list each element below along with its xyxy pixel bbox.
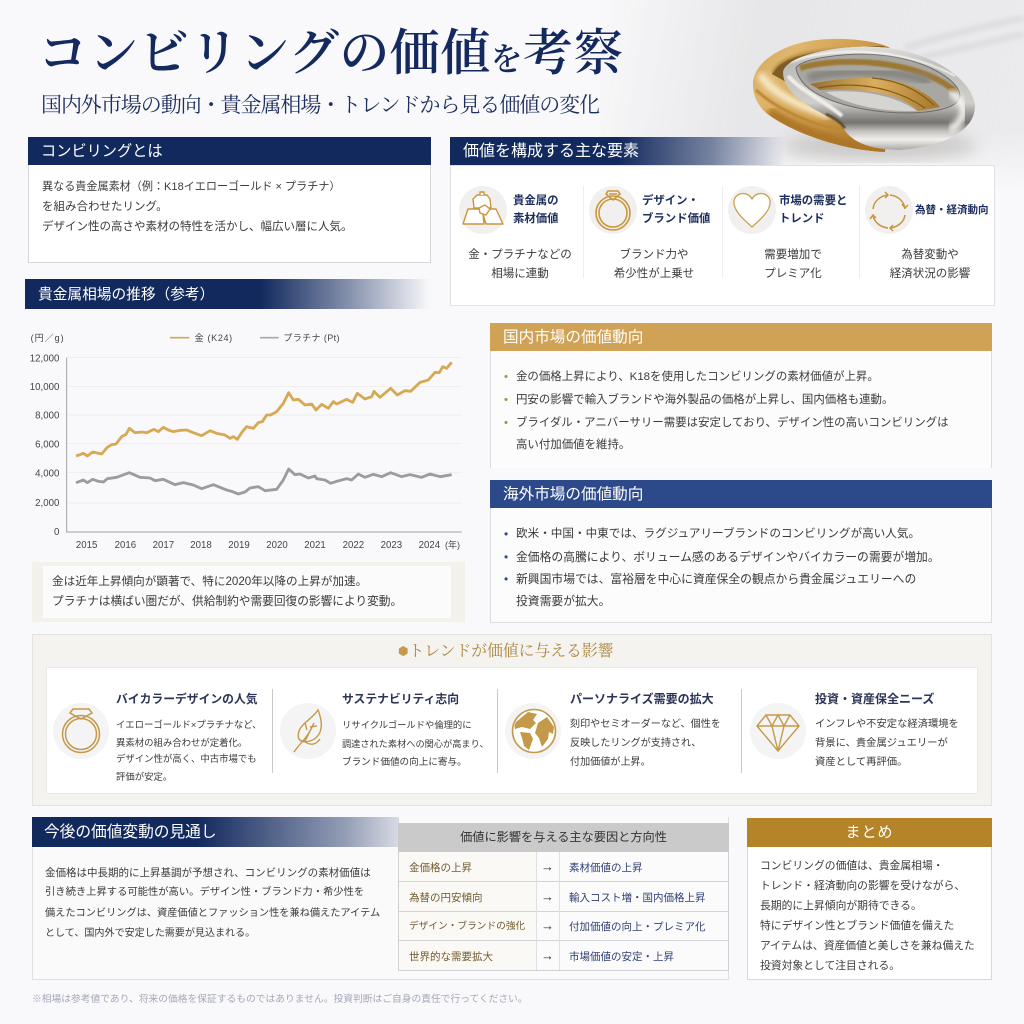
summary text: 投資対象として注目される。 <box>760 960 900 972</box>
factor: market demand and trend <box>728 186 847 280</box>
heading: value factors <box>450 137 785 165</box>
trend: sustainability: 調達された素材への関心が高まり、 <box>342 739 489 749</box>
chart: gold and platinum prices: 2016 <box>115 540 136 551</box>
chart: gold and platinum prices: 2019 <box>228 540 250 551</box>
footnote: ※相場は参考値であり、将来の価格を保証するものではありません。投資判断はご自身の責任で行ってください。 <box>32 994 528 1005</box>
chart: gold and platinum prices: 2024 <box>419 540 441 551</box>
factor: currency and economy: 為替・経済動向 <box>915 204 988 216</box>
trend: investment: 背景に、貴金属ジュエリーが <box>815 738 948 749</box>
chart: gold and platinum prices: 2018 <box>190 540 212 551</box>
chart: gold and platinum prices: 8,000 <box>35 411 59 422</box>
divider <box>272 689 273 773</box>
factor: market demand and trend: 需要増加で <box>764 249 822 261</box>
marble background <box>641 0 1024 165</box>
summary text: アイテムは、資産価値と美しさを兼ね備えた <box>760 940 975 952</box>
factor: material value: 金・プラチナなどの <box>468 249 572 261</box>
trend: personalization: 刻印やセミオーダーなど、個性を <box>570 719 721 730</box>
bullet list: overseas market <box>504 527 940 608</box>
heading: overseas market <box>490 480 992 508</box>
divider <box>583 186 584 278</box>
bullet list: domestic market: • <box>504 394 508 406</box>
table rows: 輸入コスト増・国内価格上昇 <box>569 892 706 904</box>
chart note <box>32 562 465 622</box>
outlook text: 金価格は中長期的に上昇基調が予想され、コンビリングの素材価値は <box>45 867 371 879</box>
factor: currency and economy <box>865 186 988 280</box>
definition text: デザイン性の高さや素材の特性を活かし、幅広い層に人気。 <box>42 221 352 233</box>
chart note: プラチナは横ばい圏だが、供給制約や需要回復の影響により変動。 <box>52 595 402 608</box>
chart: gold and platinum prices: 2,000 <box>35 498 59 509</box>
chart: gold and platinum prices: (円／g) <box>31 333 65 343</box>
factor: material value: 貴金属の <box>513 195 559 207</box>
divider <box>741 689 742 773</box>
trend: bicolor design: デザイン性が高く、中古市場でも <box>116 753 257 764</box>
factor: design and brand value <box>589 186 710 280</box>
bullet list: domestic market: • <box>504 417 508 429</box>
trend: personalization <box>505 692 721 768</box>
table rows: → <box>541 918 554 933</box>
title: コンビリングの価値を考察 <box>38 25 624 81</box>
trend: investment: インフレや不安定な経済環境を <box>815 719 959 730</box>
chart: gold and platinum prices: 10,000 <box>30 382 59 393</box>
chart: gold and platinum prices: 2017 <box>153 540 174 551</box>
table rows: 為替の円安傾向 <box>409 892 482 904</box>
trend: sustainability: リサイクルゴールドや倫理的に <box>342 720 472 730</box>
panel: what is combination ring <box>28 137 431 263</box>
chart: gold and platinum prices: 2021 <box>304 540 326 551</box>
bullet list: domestic market: 金の価格上昇により、K18を使用したコンビリングの素材価値が上昇。 <box>516 371 879 383</box>
trend: bicolor design: バイカラーデザインの人気 <box>116 692 258 706</box>
panel: summary <box>747 818 992 980</box>
factor: material value: 相場に連動 <box>491 268 549 280</box>
panel: domestic market <box>490 323 992 468</box>
summary text: 特にデザイン性とブランド価値を備えた <box>760 920 954 932</box>
outlook text: として、国内外で安定した需要が見込まれる。 <box>45 928 255 939</box>
heading: value factors: 価値を構成する主な要素 <box>463 143 639 160</box>
factor: design and brand value: 希少性が上乗せ <box>614 268 694 280</box>
chart: gold and platinum prices: 2020 <box>266 540 288 551</box>
heading: outlook <box>32 817 399 847</box>
heading: precious metal trend <box>25 279 430 309</box>
definition text: を組み合わせたリング。 <box>42 201 168 213</box>
trend: bicolor design: 異素材の組み合わせが定着化。 <box>116 737 247 748</box>
table: factors and direction <box>398 823 729 971</box>
summary text: コンビリングの価値は、貴金属相場・ <box>760 860 944 872</box>
bullet list: domestic market: • <box>504 371 508 383</box>
bullet list: domestic market <box>504 370 949 451</box>
heading: domestic market <box>490 323 992 351</box>
trend: investment: 投資・資産保全ニーズ <box>815 692 934 706</box>
table rows: デザイン・ブランドの強化 <box>409 921 525 932</box>
trend cards <box>46 667 978 794</box>
summary text: トレンド・経済動向の影響を受けながら、 <box>760 880 965 892</box>
trend: personalization: 付加価値が上昇。 <box>570 757 651 768</box>
chart: gold and platinum prices: 12,000 <box>30 353 59 364</box>
subtitle: 国内外市場の動向・貴金属相場・トレンドから見る価値の変化 <box>41 93 599 117</box>
chart: gold and platinum prices: 2023 <box>381 540 402 551</box>
panel: outlook <box>32 817 729 980</box>
bullet list: overseas market: 欧米・中国・中東では、ラグジュアリーブランドのコンビリングが高い人気。 <box>516 527 920 540</box>
ring interior <box>796 54 960 113</box>
heading: domestic market: 国内市場の価値動向 <box>503 329 643 346</box>
trend: bicolor design: イエローゴールド×プラチナなど、 <box>116 719 262 730</box>
heading: trend influence: ⬢トレンドが価値に与える影響 <box>398 643 613 660</box>
bullet list: overseas market: • <box>504 527 508 541</box>
bullet list: domestic market: ブライダル・アニバーサリー需要は安定しており、デザイン性の高いコンビリングは <box>516 417 949 429</box>
table rows: → <box>541 889 554 904</box>
definition text <box>42 180 352 233</box>
chart note: 金は近年上昇傾向が顕著で、特に2020年以降の上昇が加速。 <box>52 575 367 588</box>
heading: precious metal trend: 貴金属相場の推移（参考） <box>38 287 214 303</box>
heading: summary <box>747 818 992 847</box>
chart: gold and platinum prices: 金 (K24) <box>195 332 233 343</box>
bullet list: overseas market: 投資需要が拡大。 <box>516 594 610 608</box>
factor: currency and economy: 為替変動や <box>901 249 959 261</box>
trend: bicolor design: 評価が安定。 <box>116 771 172 782</box>
chart: gold and platinum prices: 4,000 <box>35 468 59 479</box>
trend: sustainability: ブランド価値の向上に寄与。 <box>342 757 467 768</box>
chart: gold and platinum prices <box>30 332 462 551</box>
factor: currency and economy: 経済状況の影響 <box>890 268 970 280</box>
trend: investment <box>750 692 959 768</box>
table rows: 金価格の上昇 <box>409 862 472 874</box>
trend: personalization: パーソナライズ需要の拡大 <box>570 692 714 706</box>
left column tint <box>399 852 536 970</box>
panel: trend influence <box>32 634 992 806</box>
chart: gold and platinum prices: 2015 <box>76 540 97 551</box>
table header: 価値に影響を与える主な要因と方向性 <box>460 830 667 844</box>
trend: investment: 資産として再評価。 <box>815 757 907 768</box>
bullet list: overseas market: 金価格の高騰により、ボリューム感のあるデザインやバイカラーの需要が増加。 <box>516 550 940 564</box>
divider <box>497 689 498 773</box>
heading: outlook: 今後の価値変動の見通し <box>44 824 217 841</box>
heading: summary: まとめ <box>845 824 894 841</box>
chart: gold and platinum prices: プラチナ (Pt) <box>283 333 340 343</box>
chart: gold and platinum prices: (年) <box>445 539 460 550</box>
divider <box>859 186 860 278</box>
chart: gold and platinum prices: 6,000 <box>35 439 59 450</box>
table rows: 素材価値の上昇 <box>569 862 642 874</box>
bullet list: domestic market: 高い付加価値を維持。 <box>516 439 630 451</box>
factor: market demand and trend: プレミア化 <box>764 268 822 280</box>
summary text <box>760 860 975 972</box>
factor: market demand and trend: トレンド <box>779 213 825 225</box>
table rows: 市場価値の安定・上昇 <box>569 951 674 963</box>
outlook text: 備えたコンビリングは、資産価値とファッション性を兼ね備えたアイテム <box>45 908 380 919</box>
bullet list: domestic market: 円安の影響で輸入ブランドや海外製品の価格が上昇し、国内価格も連動。 <box>516 394 893 406</box>
factor: design and brand value: ブランド力や <box>620 249 688 261</box>
table rows: 付加価値の向上・プレミア化 <box>569 921 706 933</box>
bullet list: overseas market: • <box>504 572 508 586</box>
divider <box>722 186 723 278</box>
silver band <box>783 47 975 150</box>
trend: personalization: 反映したリングが支持され、 <box>570 738 701 749</box>
table rows: 世界的な需要拡大 <box>409 951 493 963</box>
outlook text <box>45 867 380 939</box>
table header <box>398 823 729 852</box>
heading: what is combination ring: コンビリングとは <box>41 143 162 160</box>
factor: material value <box>459 186 572 280</box>
bullet list: overseas market: 新興国市場では、富裕層を中心に資産保全の観点から貴金属ジュエリーへの <box>516 572 916 586</box>
bullet list: overseas market: • <box>504 550 508 564</box>
definition text: 異なる貴金属素材（例：K18イエローゴールド × プラチナ） <box>42 181 341 193</box>
table rows <box>399 852 728 970</box>
heading: what is combination ring <box>28 137 431 165</box>
panel: overseas market <box>490 480 992 623</box>
trend: bicolor design <box>53 692 262 782</box>
factor: design and brand value: ブランド価値 <box>642 213 710 225</box>
gold band <box>753 38 890 152</box>
chart: gold and platinum prices: 2022 <box>343 540 364 551</box>
table rows: → <box>541 948 554 963</box>
heading: overseas market: 海外市場の価値動向 <box>503 486 643 503</box>
chart: gold and platinum prices: 0 <box>54 527 59 538</box>
factor: design and brand value: デザイン・ <box>642 195 699 207</box>
outlook text: 引き続き上昇する可能性が高い。デザイン性・ブランド力・希少性を <box>45 887 364 898</box>
panel: value factors <box>450 165 995 306</box>
factor: market demand and trend: 市場の需要と <box>779 195 847 207</box>
summary text: 長期的に上昇傾向が期待できる。 <box>760 900 922 912</box>
factor: material value: 素材価値 <box>513 213 559 225</box>
hero photo: combination ring <box>753 16 1022 163</box>
table rows: → <box>541 859 554 874</box>
trend: sustainability: サステナビリティ志向 <box>342 692 459 706</box>
trend: sustainability <box>280 692 489 768</box>
